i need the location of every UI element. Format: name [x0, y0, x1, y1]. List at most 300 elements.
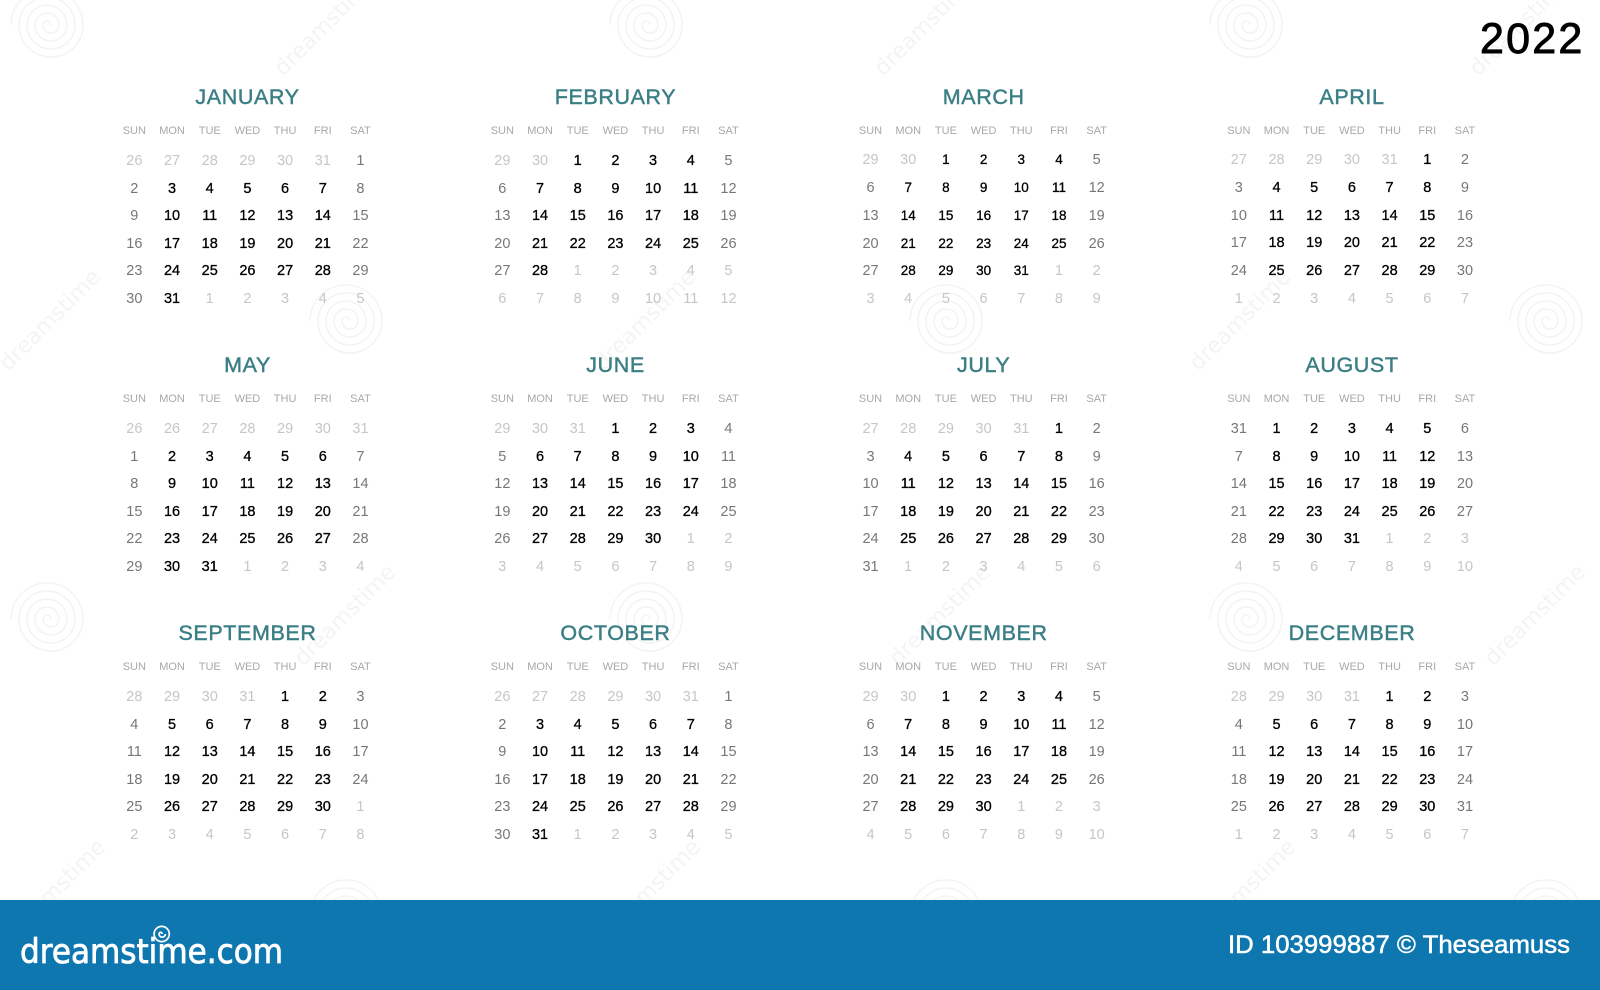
- date grid: July: 11: [901, 476, 916, 492]
- date grid: November: 28: [900, 799, 916, 815]
- date grid: April: 23: [1457, 235, 1473, 251]
- weekday header: November: SUN: [859, 661, 882, 673]
- date grid: October: 28: [570, 689, 586, 705]
- date grid: May: 21: [352, 504, 369, 520]
- date grid: February: 5: [724, 263, 732, 279]
- date grid: December: 20: [1306, 772, 1322, 788]
- date grid: November: 22: [938, 772, 954, 788]
- date grid: February: 12: [720, 181, 737, 197]
- weekday header: January: MON: [159, 125, 185, 137]
- date grid: July: 31: [862, 559, 879, 575]
- date grid: March: 9: [980, 180, 987, 195]
- date grid: August: 16: [1306, 476, 1322, 492]
- date grid: December: [1231, 689, 1473, 843]
- panel: April: [1227, 85, 1475, 307]
- date grid: May: 4: [356, 559, 364, 575]
- date grid: June: 1: [687, 531, 695, 547]
- weekday header: June: FRI: [682, 393, 700, 405]
- date grid: May: 22: [126, 531, 142, 547]
- date grid: June: 10: [683, 449, 699, 465]
- date grid: August: 26: [1419, 504, 1435, 520]
- date grid: June: 28: [570, 531, 586, 547]
- date grid: July: 18: [900, 504, 916, 520]
- date grid: May: 17: [202, 504, 218, 520]
- date grid: February: 30: [532, 153, 548, 169]
- date grid: September: 21: [239, 772, 255, 788]
- date grid: February: 9: [611, 181, 619, 197]
- date grid: September: 17: [352, 744, 369, 760]
- date grid: October: 3: [536, 717, 544, 733]
- weekday header: June: [491, 393, 739, 405]
- date grid: December: 25: [1231, 799, 1247, 815]
- date grid: November: 20: [862, 772, 879, 788]
- date grid: March: 9: [1093, 291, 1101, 307]
- date grid: October: 25: [570, 799, 586, 815]
- heading: June: JUNE: [586, 353, 645, 377]
- date grid: July: 2: [942, 559, 950, 575]
- date grid: October: 31: [532, 827, 548, 843]
- weekday header: April: TUE: [1303, 125, 1325, 137]
- date grid: March: 16: [976, 208, 991, 223]
- date grid: October: 2: [611, 827, 619, 843]
- date grid: April: 3: [1310, 291, 1318, 307]
- date grid: October: 31: [683, 689, 699, 705]
- weekday header: September: THU: [274, 661, 296, 673]
- date grid: May: 29: [277, 421, 293, 437]
- date grid: June: 1: [611, 421, 619, 437]
- date grid: June: 3: [687, 421, 695, 437]
- date grid: June: 9: [649, 449, 657, 465]
- date grid: May: 26: [277, 531, 293, 547]
- date grid: December: 18: [1231, 772, 1247, 788]
- date grid: April: 7: [1386, 180, 1394, 196]
- panel: November: [859, 621, 1107, 843]
- date grid: February: 5: [724, 153, 732, 169]
- date grid: November: 10: [1089, 827, 1105, 843]
- date grid: June: 15: [607, 476, 623, 492]
- date grid: October: 1: [574, 827, 582, 843]
- date grid: August: 11: [1382, 449, 1397, 465]
- date grid: January: 28: [315, 263, 331, 279]
- date grid: September: 27: [202, 799, 218, 815]
- date grid: April: 28: [1268, 152, 1285, 168]
- date grid: October: 17: [532, 772, 548, 788]
- date grid: February: 11: [683, 181, 698, 197]
- date grid: June: 30: [532, 421, 548, 437]
- date grid: October: 26: [494, 689, 510, 705]
- date grid: July: [862, 421, 1105, 575]
- date grid: March: 2: [980, 152, 987, 167]
- date grid: December: 1: [1386, 689, 1394, 705]
- date grid: March: 26: [1089, 236, 1105, 252]
- date grid: January: 27: [277, 263, 293, 279]
- date grid: October: [494, 689, 737, 843]
- date grid: May: 1: [130, 449, 138, 465]
- date grid: April: 21: [1382, 235, 1398, 251]
- weekday header: April: THU: [1378, 125, 1401, 137]
- date grid: February: 18: [683, 208, 699, 224]
- date grid: January: 6: [281, 181, 289, 197]
- date grid: July: 16: [1089, 476, 1105, 492]
- heading: February: FEBRUARY: [555, 85, 676, 109]
- date grid: September: 23: [315, 772, 331, 788]
- date grid: May: 5: [281, 449, 289, 465]
- date grid: September: 3: [168, 827, 176, 843]
- date grid: October: 26: [607, 799, 623, 815]
- date grid: June: 5: [498, 449, 506, 465]
- weekday header: April: [1227, 125, 1475, 137]
- date grid: December: 17: [1457, 744, 1473, 760]
- heading: August: AUGUST: [1305, 353, 1399, 377]
- date grid: March: 2: [1093, 263, 1101, 279]
- date grid: December: 11: [1231, 744, 1246, 760]
- date grid: December: 31: [1457, 799, 1473, 815]
- date grid: July: 28: [900, 421, 916, 437]
- date grid: August: 3: [1461, 531, 1469, 547]
- date grid: July: 14: [1013, 476, 1029, 492]
- date grid: November: 23: [976, 772, 992, 788]
- date grid: July: 27: [862, 421, 879, 437]
- date grid: March: 3: [866, 291, 875, 307]
- date grid: December: 29: [1382, 799, 1398, 815]
- weekday header: November: SAT: [1086, 661, 1107, 673]
- date grid: April: 1: [1423, 152, 1431, 168]
- date grid: March: 29: [862, 152, 879, 168]
- date grid: April: 10: [1231, 208, 1247, 224]
- date grid: February: 29: [494, 153, 510, 169]
- date grid: May: 29: [126, 559, 142, 575]
- date grid: January: 29: [239, 153, 255, 169]
- weekday header: May: SAT: [350, 393, 371, 405]
- date grid: April: 11: [1269, 208, 1284, 224]
- date grid: September: 26: [164, 799, 180, 815]
- panel: June: [491, 353, 739, 575]
- date grid: January: 5: [243, 181, 251, 197]
- weekday header: August: SAT: [1455, 393, 1475, 405]
- date grid: April: 7: [1461, 291, 1469, 307]
- date grid: December: 29: [1268, 689, 1285, 705]
- weekday header: October: FRI: [682, 661, 700, 673]
- weekday header: September: [123, 661, 371, 673]
- date grid: April: 4: [1272, 180, 1281, 196]
- date grid: May: 10: [202, 476, 218, 492]
- date grid: August: 4: [1386, 421, 1394, 437]
- date grid: September: 30: [315, 799, 331, 815]
- date grid: February: 1: [574, 153, 582, 169]
- date grid: November: 12: [1089, 717, 1105, 733]
- date grid: August: 23: [1306, 504, 1322, 520]
- date grid: June: 27: [532, 531, 548, 547]
- date grid: April: 3: [1235, 180, 1243, 196]
- date grid: October: 24: [532, 799, 548, 815]
- date grid: September: 7: [319, 827, 327, 843]
- date grid: September: 15: [277, 744, 293, 760]
- weekday header: February: MON: [527, 125, 553, 137]
- date grid: September: 28: [239, 799, 255, 815]
- weekday header: October: TUE: [567, 661, 589, 673]
- date grid: October: 4: [574, 717, 582, 733]
- date grid: February: 21: [532, 236, 548, 252]
- date grid: July: 5: [1055, 559, 1063, 575]
- date grid: November: 7: [904, 717, 912, 733]
- weekday header: April: MON: [1264, 125, 1289, 137]
- date grid: March: 4: [904, 291, 912, 307]
- weekday header: January: TUE: [199, 125, 221, 137]
- date grid: June: 3: [498, 559, 506, 575]
- date grid: July: 15: [1051, 476, 1067, 492]
- weekday header: December: WED: [1339, 661, 1365, 673]
- date grid: April: [1231, 152, 1473, 307]
- heading: October: OCTOBER: [560, 621, 671, 645]
- date grid: February: 28: [532, 263, 548, 279]
- date grid: July: 22: [1051, 504, 1067, 520]
- date grid: December: 15: [1382, 744, 1398, 760]
- date grid: September: 6: [206, 717, 214, 733]
- image id and credit: ID 103999887 © Theseamuss: [1228, 931, 1570, 959]
- date grid: August: 6: [1310, 559, 1318, 575]
- year heading: 2022: [1480, 15, 1584, 63]
- date grid: August: 17: [1344, 476, 1360, 492]
- date grid: October: 12: [607, 744, 623, 760]
- weekday header: September: WED: [235, 661, 260, 673]
- date grid: August: 7: [1348, 559, 1356, 575]
- date grid: May: 3: [319, 559, 327, 575]
- date grid: April: 25: [1268, 263, 1285, 279]
- weekday header: October: MON: [527, 661, 553, 673]
- date grid: April: 17: [1231, 235, 1247, 251]
- weekday header: January: SUN: [123, 125, 146, 137]
- background watermark pattern: dreamstime: [590, 265, 701, 376]
- weekday header: December: SUN: [1227, 661, 1250, 673]
- weekday header: February: SAT: [718, 125, 739, 137]
- date grid: July: 10: [862, 476, 879, 492]
- weekday header: June: MON: [527, 393, 553, 405]
- date grid: January: 3: [281, 291, 289, 307]
- weekday header: September: FRI: [314, 661, 332, 673]
- date grid: May: 1: [243, 559, 251, 575]
- date grid: March: 18: [1051, 208, 1066, 223]
- date grid: June: 17: [683, 476, 699, 492]
- date grid: November: 29: [938, 799, 954, 815]
- date grid: August: 2: [1310, 421, 1318, 437]
- date grid: December: 8: [1386, 717, 1394, 733]
- date grid: March: 10: [1014, 180, 1029, 195]
- date grid: April: 22: [1419, 235, 1435, 251]
- date grid: December: 14: [1344, 744, 1360, 760]
- date grid: July: 29: [938, 421, 954, 437]
- date grid: February: [494, 153, 737, 307]
- weekday header: January: WED: [235, 125, 260, 137]
- date grid: October: 14: [683, 744, 699, 760]
- date grid: December: 10: [1457, 717, 1473, 733]
- date grid: September: [126, 689, 369, 843]
- date grid: May: 9: [168, 476, 176, 492]
- date grid: March: 15: [938, 208, 953, 223]
- date grid: September: 1: [281, 689, 289, 705]
- date grid: April: 31: [1382, 152, 1398, 168]
- date grid: March: 14: [901, 208, 916, 223]
- date grid: December: 23: [1419, 772, 1435, 788]
- date grid: October: 16: [494, 772, 510, 788]
- panel: February: [491, 85, 739, 307]
- date grid: September: 28: [126, 689, 142, 705]
- date grid: June: 4: [536, 559, 544, 575]
- date grid: October: 5: [611, 717, 619, 733]
- date grid: November: 19: [1089, 744, 1105, 760]
- date grid: July: 1: [1055, 421, 1063, 437]
- date grid: January: 25: [202, 263, 218, 279]
- date grid: June: [494, 421, 737, 575]
- date grid: April: 2: [1272, 291, 1281, 307]
- footer bar: [0, 900, 1600, 990]
- date grid: January: 4: [206, 181, 214, 197]
- date grid: February: 8: [574, 181, 582, 197]
- date grid: December: 22: [1382, 772, 1398, 788]
- weekday header: August: WED: [1339, 393, 1365, 405]
- date grid: September: 30: [202, 689, 218, 705]
- date grid: February: 23: [607, 236, 623, 252]
- date grid: November: 7: [980, 827, 988, 843]
- date grid: August: 10: [1457, 559, 1473, 575]
- date grid: December: 24: [1457, 772, 1473, 788]
- panel: March: [859, 85, 1107, 307]
- date grid: July: 4: [1017, 559, 1025, 575]
- date grid: February: 11: [683, 291, 698, 307]
- weekday header: September: SUN: [123, 661, 146, 673]
- weekday header: November: WED: [971, 661, 996, 673]
- date grid: June: 19: [494, 504, 510, 520]
- date grid: June: 2: [649, 421, 657, 437]
- heading: May: MAY: [224, 353, 271, 377]
- date grid: May: 6: [319, 449, 327, 465]
- weekday header: February: [491, 125, 739, 137]
- date grid: February: 8: [574, 291, 582, 307]
- date grid: June: 7: [649, 559, 657, 575]
- date grid: March: 29: [938, 263, 953, 278]
- date grid: July: 7: [1017, 449, 1025, 465]
- weekday header: May: [123, 393, 371, 405]
- background watermark pattern: dreamstime: [1185, 265, 1296, 376]
- date grid: January: 2: [243, 291, 251, 307]
- date grid: January: 7: [319, 181, 327, 197]
- date grid: October: 5: [724, 827, 732, 843]
- date grid: January: 28: [202, 153, 218, 169]
- date grid: August: 3: [1348, 421, 1356, 437]
- date grid: January: 21: [315, 236, 331, 252]
- date grid: July: 9: [1093, 449, 1101, 465]
- date grid: March: 21: [901, 236, 916, 251]
- date grid: September: 11: [127, 744, 142, 760]
- date grid: November: 3: [1093, 799, 1101, 815]
- date grid: August: 15: [1268, 476, 1285, 492]
- date grid: June: 7: [574, 449, 582, 465]
- weekday header: October: SAT: [718, 661, 739, 673]
- weekday header: January: THU: [274, 125, 296, 137]
- date grid: October: 15: [720, 744, 737, 760]
- date grid: August: 8: [1386, 559, 1394, 575]
- weekday header: April: WED: [1339, 125, 1365, 137]
- date grid: July: 27: [976, 531, 992, 547]
- date grid: October: 22: [720, 772, 737, 788]
- weekday header: October: WED: [603, 661, 628, 673]
- date grid: June: 14: [570, 476, 586, 492]
- weekday header: July: [859, 393, 1107, 405]
- date grid: January: 17: [164, 236, 180, 252]
- weekday header: June: SAT: [718, 393, 739, 405]
- date grid: April: 4: [1348, 291, 1356, 307]
- date grid: June: 30: [645, 531, 661, 547]
- date grid: June: 16: [645, 476, 661, 492]
- date grid: August: 10: [1344, 449, 1360, 465]
- weekday header: December: SAT: [1455, 661, 1475, 673]
- date grid: September: 25: [126, 799, 142, 815]
- date grid: October: 9: [498, 744, 506, 760]
- date grid: April: 27: [1344, 263, 1360, 279]
- date grid: June: 8: [611, 449, 619, 465]
- date grid: September: 8: [356, 827, 364, 843]
- date grid: June: 26: [494, 531, 510, 547]
- date grid: August: 18: [1382, 476, 1398, 492]
- date grid: January: 23: [126, 263, 142, 279]
- date grid: January: 3: [168, 181, 176, 197]
- date grid: September: 29: [277, 799, 293, 815]
- date grid: November: 21: [900, 772, 916, 788]
- date grid: December: 19: [1268, 772, 1285, 788]
- date grid: February: 24: [645, 236, 661, 252]
- date grid: March: 12: [1089, 180, 1105, 196]
- date grid: April: 12: [1306, 208, 1322, 224]
- date grid: November: 30: [900, 689, 916, 705]
- date grid: December: 5: [1272, 717, 1281, 733]
- date grid: November: 27: [862, 799, 879, 815]
- icon: spiral logo: [154, 926, 169, 942]
- date grid: April: 18: [1268, 235, 1285, 251]
- date grid: November: 15: [938, 744, 954, 760]
- weekday header: November: THU: [1010, 661, 1033, 673]
- date grid: August: 9: [1423, 559, 1431, 575]
- date grid: November: 17: [1013, 744, 1029, 760]
- date grid: March: 20: [862, 236, 879, 252]
- date grid: August: 31: [1344, 531, 1360, 547]
- date grid: May: 2: [281, 559, 289, 575]
- weekday header: September: TUE: [199, 661, 221, 673]
- date grid: November: 4: [866, 827, 875, 843]
- date grid: December: 3: [1310, 827, 1318, 843]
- date grid: October: 27: [645, 799, 661, 815]
- date grid: September: 6: [281, 827, 289, 843]
- weekday header: June: SUN: [491, 393, 514, 405]
- date grid: June: 6: [536, 449, 544, 465]
- date grid: March: 1: [1055, 263, 1063, 279]
- weekday header: October: SUN: [491, 661, 514, 673]
- weekday header: March: MON: [895, 125, 921, 137]
- date grid: June: 6: [611, 559, 619, 575]
- panel: May: [123, 353, 371, 575]
- weekday header: April: SUN: [1227, 125, 1250, 137]
- date grid: November: 29: [862, 689, 879, 705]
- date grid: August: 27: [1457, 504, 1473, 520]
- weekday header: June: THU: [642, 393, 664, 405]
- date grid: January: 1: [356, 153, 364, 169]
- panel: October: [491, 621, 739, 843]
- date grid: April: 29: [1306, 152, 1322, 168]
- date grid: July: 17: [862, 504, 879, 520]
- date grid: May: 27: [202, 421, 218, 437]
- date grid: July: 26: [938, 531, 954, 547]
- date grid: December: 7: [1461, 827, 1469, 843]
- date grid: May: 28: [352, 531, 369, 547]
- date grid: July: 6: [1093, 559, 1101, 575]
